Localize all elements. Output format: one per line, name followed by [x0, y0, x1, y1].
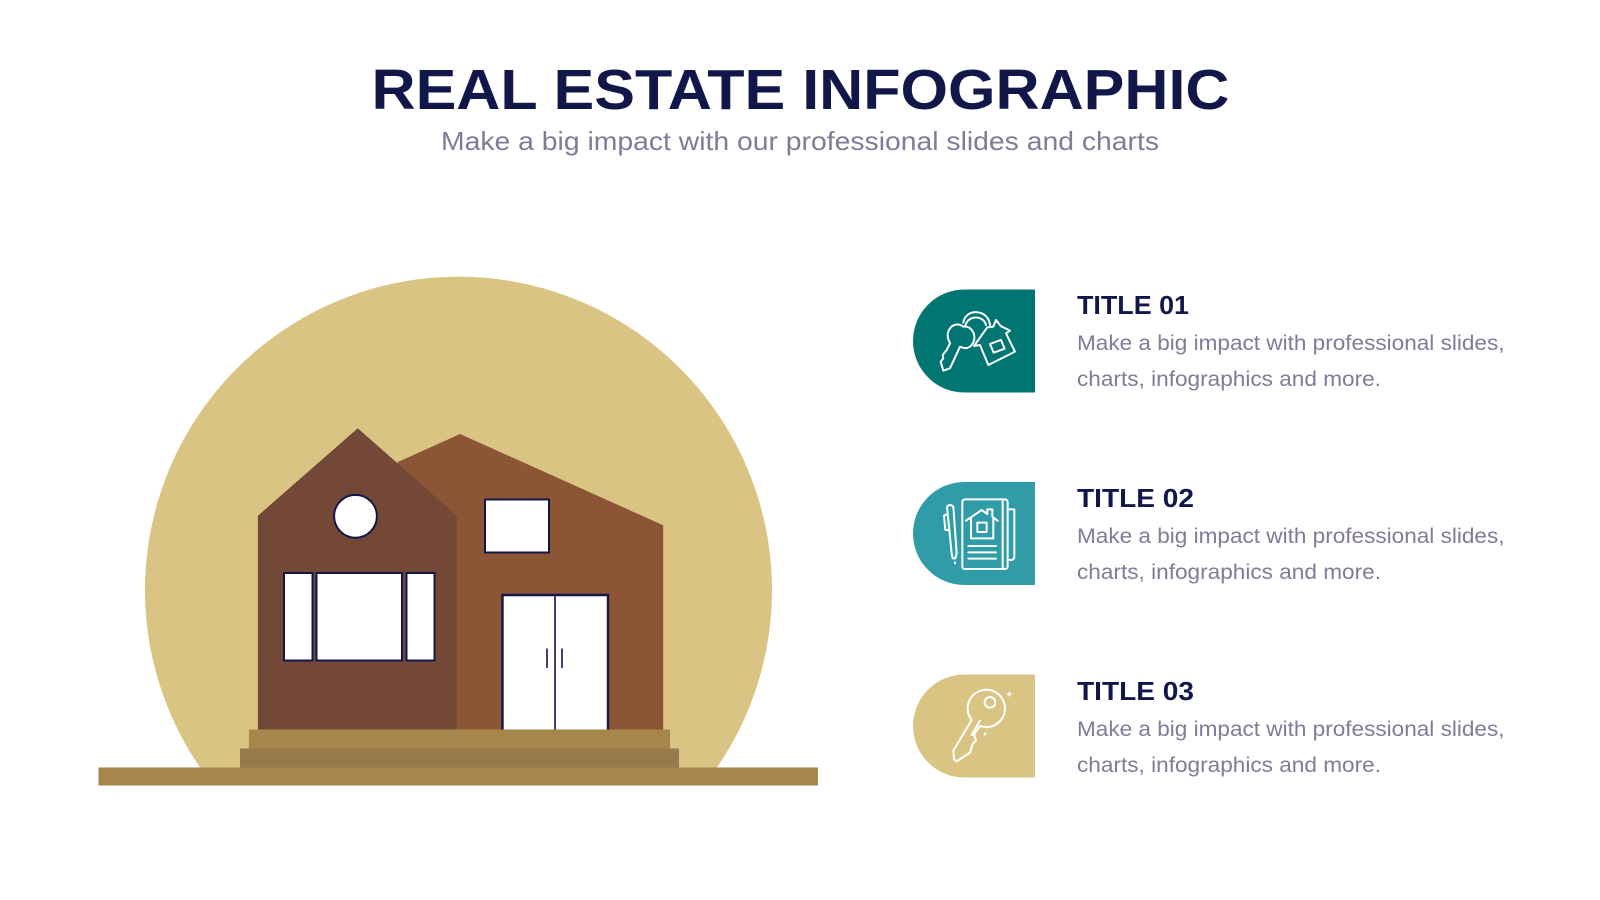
badge 03 — [913, 674, 1035, 778]
ground strip — [98, 768, 818, 786]
item 02 — [913, 482, 1504, 585]
description 03 — [1077, 718, 1504, 777]
description 03: Make a big impact with professional slides, — [1077, 718, 1504, 741]
subtitle: Make a big impact with our professional slides and charts — [441, 126, 1159, 156]
upper step — [249, 730, 670, 748]
title 02: TITLE 02 — [1077, 483, 1194, 513]
right house body — [397, 434, 663, 730]
centre window — [316, 573, 402, 660]
right narrow window — [406, 573, 434, 660]
icon: keys with house tag — [941, 312, 1015, 371]
round window — [334, 495, 377, 538]
description 02: Make a big impact with professional slides, — [1077, 525, 1504, 548]
description 01: Make a big impact with professional slides, — [1077, 332, 1504, 355]
badge 01 — [913, 290, 1035, 392]
title 01: TITLE 01 — [1077, 290, 1189, 320]
item 03 — [913, 674, 1504, 778]
sun circle backdrop — [145, 277, 772, 768]
badge 02 — [913, 482, 1035, 585]
left house body — [258, 428, 457, 730]
double door — [502, 595, 608, 730]
lower step — [240, 748, 679, 768]
square window — [485, 500, 549, 552]
icon: key with sparkles — [953, 690, 1011, 761]
title 03: TITLE 03 — [1077, 676, 1194, 706]
house illustration — [98, 277, 818, 786]
description 01: charts, infographics and more. — [1077, 368, 1381, 391]
description 02: charts, infographics and more. — [1077, 561, 1381, 584]
icon: property document and pen — [944, 499, 1014, 569]
description 01 — [1077, 332, 1504, 391]
item 01 — [913, 290, 1504, 392]
left narrow window — [284, 573, 312, 660]
description 02 — [1077, 525, 1504, 584]
description 03: charts, infographics and more. — [1077, 754, 1381, 777]
title: REAL ESTATE INFOGRAPHIC — [372, 58, 1230, 122]
